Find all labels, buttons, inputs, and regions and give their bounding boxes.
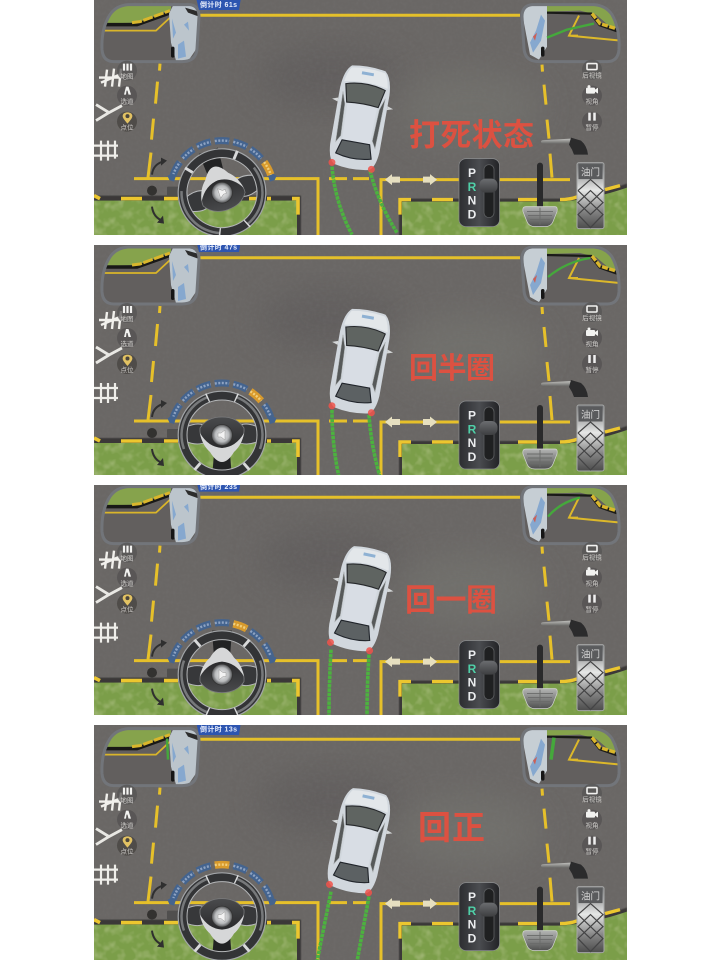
countdown tag [197,485,240,492]
panel 3: 回一圈 [94,480,627,725]
gear shifter: R [468,662,477,676]
gear shifter: N [468,436,476,450]
steering wheel [178,631,266,718]
side buttons: 点位 [120,123,134,132]
handbrake [541,862,588,879]
throttle pedal: 油门 [581,409,600,421]
handbrake [541,138,588,155]
heading: 回一圈 [405,583,497,618]
throttle pedal [577,887,604,953]
gear shifter: N [468,676,476,690]
throttle pedal: 油门 [581,167,600,179]
green reverse tracks [332,410,380,477]
countdown tag: 倒计时 23s [200,482,237,491]
side buttons: 视角 [586,97,598,106]
heading: 回正 [418,809,485,846]
left mirror [100,485,200,545]
gear shifter: P [468,408,476,422]
direction arrows [385,898,437,909]
gear shifter [459,883,500,951]
handbrake [541,380,588,397]
right mirror with green track [522,485,622,544]
side buttons: 后视镜 [582,795,602,804]
side buttons: 点位 [120,605,134,614]
gear shifter: N [468,918,476,932]
brake pedal [523,405,557,469]
side buttons: 视角 [586,339,598,348]
side buttons: 点位 [120,365,134,374]
side buttons: 暂停 [586,365,599,374]
side buttons: 地图 [120,796,134,805]
car [328,308,393,416]
steering wheel [178,391,266,479]
side buttons: 暂停 [586,847,599,856]
gear shifter [459,159,500,227]
side buttons: 点位 [120,847,134,856]
gear shifter [459,401,500,469]
direction arrows [385,174,437,185]
green reverse tracks [317,892,369,960]
steering wheel [178,873,266,960]
countdown tag: 倒计时 61s [200,0,237,9]
countdown tag [196,0,241,10]
side buttons: 选道 [120,579,134,588]
side buttons [117,302,602,374]
gear shifter: D [468,208,477,222]
side buttons: 暂停 [586,605,599,614]
side buttons: 地图 [120,314,134,323]
road scene [94,0,627,243]
right mirror with green track [522,245,622,304]
countdown tag: 倒计时 13s [200,725,237,734]
green reverse tracks [332,167,397,235]
heading: 打死状态 [409,118,534,153]
countdown tag [196,722,241,735]
gear shifter: D [468,932,477,946]
right mirror with green track [522,3,622,62]
gear shifter: P [468,890,476,904]
steering scale [166,623,278,664]
throttle pedal: 油门 [581,649,600,661]
side buttons: 视角 [586,821,598,830]
brake pedal [523,645,557,709]
direction arrows [385,656,437,667]
road scene [94,722,627,960]
side buttons: 视角 [586,579,598,588]
side buttons: 地图 [120,72,134,81]
steering scale [166,865,278,906]
gear shifter: R [468,904,477,918]
steering scale [166,141,278,182]
brake pedal [523,887,557,951]
gear shifter: R [468,422,477,436]
green reverse tracks [329,650,369,717]
side buttons: 选道 [120,97,134,106]
heading: 回半圈 [409,352,495,385]
steering wheel [178,148,266,235]
car [327,546,394,654]
gear shifter: N [468,194,476,208]
gear shifter: P [468,648,476,662]
direction arrows [385,416,437,428]
side buttons: 选道 [120,339,134,348]
brake pedal [523,163,557,227]
gear shifter: D [468,690,477,704]
side buttons: 后视镜 [582,71,602,80]
side buttons: 选道 [120,821,134,830]
throttle pedal [577,405,604,471]
side buttons: 暂停 [586,123,599,132]
gear shifter: P [468,166,476,180]
road scene [94,480,627,725]
gear shifter: R [468,180,477,194]
countdown tag: 倒计时 47s [200,242,237,252]
handbrake [541,620,588,637]
side buttons: 地图 [120,554,134,563]
side buttons [117,60,602,132]
throttle pedal [577,163,604,229]
throttle pedal: 油门 [581,891,600,903]
car [318,784,400,898]
side buttons: 后视镜 [582,553,602,562]
left mirror [100,3,200,63]
panel 4: 回正 [94,722,627,960]
side buttons [117,784,602,856]
left mirror with green track [100,727,200,787]
panel 2: 回半圈 [94,240,627,485]
side buttons: 后视镜 [582,313,602,322]
throttle pedal [577,645,604,711]
steering scale [166,383,278,424]
left mirror [100,245,200,305]
panel 1: 打死状态 [94,0,627,248]
road scene [94,240,627,485]
gear shifter [459,641,500,709]
right mirror with green track [522,727,622,786]
side buttons [117,542,602,614]
car [328,65,393,173]
gear shifter: D [468,450,477,464]
